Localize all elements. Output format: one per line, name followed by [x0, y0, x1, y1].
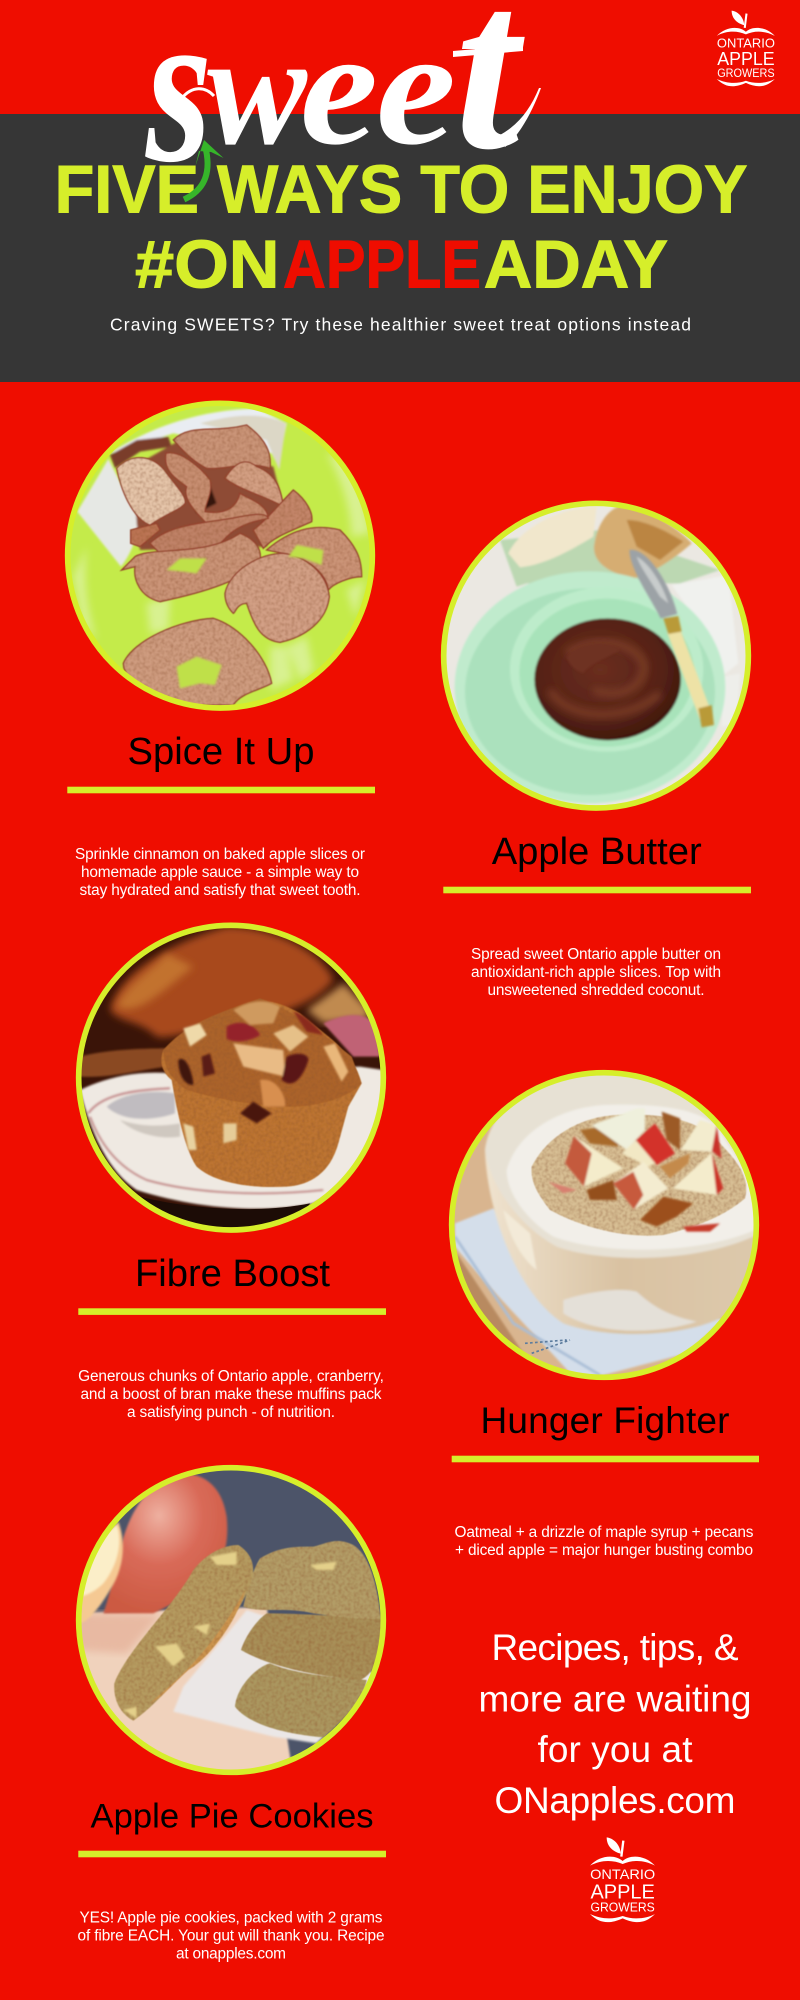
text: fibre boost: Generous chunks of Ontario apple, cranberry, — [78, 1368, 384, 1385]
divider: apple pie cookies — [78, 1851, 386, 1857]
logo: Ontario Apple Growers top: ONTARIO — [717, 37, 775, 51]
text: spice it up: homemade apple sauce - a simple way to — [81, 864, 359, 881]
logo: Ontario Apple Growers top: APPLE — [717, 48, 775, 69]
divider: apple butter — [443, 887, 751, 893]
text: apple pie cookies: of fibre EACH. Your gut will thank you. Recipe — [78, 1928, 384, 1945]
text: spice it up: Sprinkle cinnamon on baked apple slices or — [75, 846, 365, 863]
heading: five ways to enjoy: FIVE WAYS TO ENJOY — [55, 151, 747, 227]
title: sweet script word: w — [207, 0, 308, 178]
logo: Ontario Apple Growers bottom: GROWERS — [590, 1900, 655, 1915]
icon: green arrow — [184, 140, 224, 200]
title: sweet script word: e — [376, 0, 456, 179]
text: apple pie cookies: YES! Apple pie cookies, packed with 2 grams — [80, 1910, 383, 1927]
logo: Ontario Apple Growers bottom: ONTARIO — [590, 1866, 655, 1882]
panel: fibre boost — [73, 920, 393, 1421]
heading: hashtag: APPLE — [283, 226, 481, 302]
heading: hashtag: ADAY — [484, 226, 668, 302]
title: sweet script word: e — [300, 0, 378, 179]
logo: Ontario Apple Growers bottom — [590, 1837, 655, 1922]
divider: fibre boost — [78, 1308, 386, 1315]
dark header band — [0, 114, 800, 382]
photo: apple butter — [433, 497, 753, 817]
logo: Ontario Apple Growers top — [717, 11, 775, 86]
text: apple butter — [471, 946, 721, 999]
panel: hunger fighter — [443, 1067, 763, 1559]
panel: apple pie cookies — [73, 1460, 393, 1963]
text: hunger fighter — [454, 1524, 754, 1559]
text: fibre boost: a satisfying punch - of nutrition. — [127, 1404, 335, 1421]
photo: cookies — [73, 1460, 393, 1780]
photo: oatmeal bowl — [443, 1067, 763, 1387]
callout: recipes: more are waiting — [478, 1679, 752, 1720]
panel: apple butter — [433, 497, 753, 999]
logo: Ontario Apple Growers top: GROWERS — [717, 68, 775, 80]
divider: hunger fighter — [452, 1456, 759, 1462]
text: fibre boost — [78, 1368, 384, 1421]
heading: hashtag: #ON — [135, 226, 280, 302]
heading: fibre boost: Fibre Boost — [135, 1252, 330, 1295]
panel: spice it up — [60, 397, 380, 899]
divider: spice it up — [67, 787, 375, 793]
subtitle: Craving SWEETS? Try these healthier sweet treat options instead — [110, 315, 691, 335]
text: apple butter: unsweetened shredded coconut. — [488, 982, 704, 999]
text: fibre boost: and a boost of bran make these muffins pack — [80, 1386, 382, 1403]
heading: apple pie cookies: Apple Pie Cookies — [90, 1798, 374, 1836]
text: spice it up — [75, 846, 365, 899]
text: apple pie cookies: at onapples.com — [176, 1946, 286, 1963]
heading: spice it up: Spice It Up — [128, 730, 314, 773]
photo: muffin — [73, 920, 393, 1240]
photo: apple chips — [60, 397, 380, 717]
text: apple butter: Spread sweet Ontario apple butter on — [471, 946, 721, 963]
heading: hunger fighter: Hunger Fighter — [480, 1400, 730, 1441]
callout: recipes: Recipes, tips, & — [492, 1627, 739, 1668]
text: hunger fighter: Oatmeal + a drizzle of maple syrup + pecans — [454, 1524, 754, 1541]
logo: Ontario Apple Growers bottom: APPLE — [590, 1880, 655, 1903]
text: apple butter: antioxidant-rich apple slices. Top with — [471, 964, 721, 981]
text: spice it up: stay hydrated and satisfy that sweet tooth. — [80, 882, 360, 899]
callout: recipes: ONapples.com — [494, 1780, 736, 1821]
text: hunger fighter: + diced apple = major hunger busting combo — [455, 1542, 753, 1559]
heading: apple butter: Apple Butter — [492, 830, 702, 873]
callout: recipes — [478, 1627, 752, 1821]
callout: recipes: for you at — [538, 1729, 693, 1770]
text: apple pie cookies — [78, 1910, 384, 1963]
title: sweet script word — [144, 0, 541, 209]
